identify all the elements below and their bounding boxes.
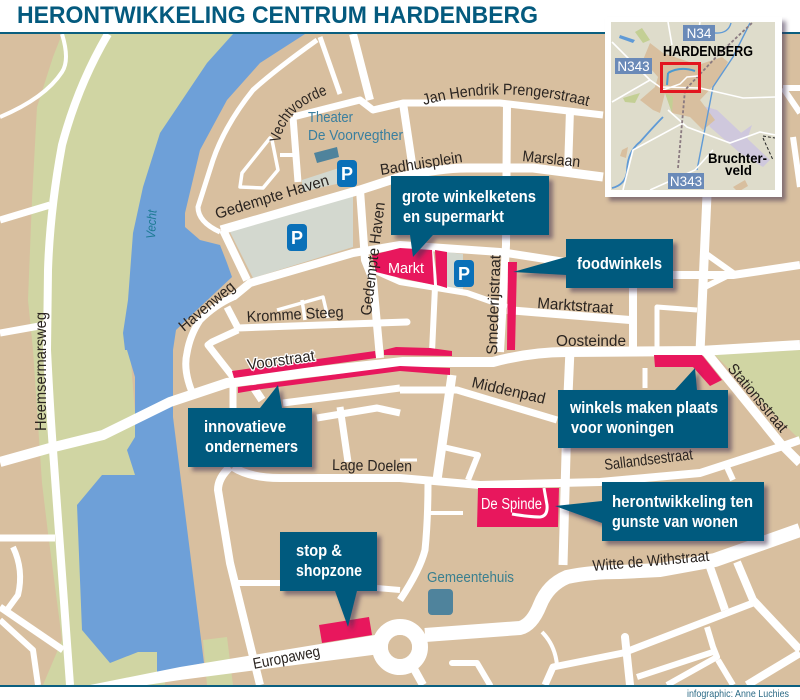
callout: foodwinkels: foodwinkels bbox=[577, 255, 662, 273]
street names: Middenpad bbox=[470, 374, 547, 408]
street names: Gedempte Haven bbox=[358, 201, 389, 316]
street names: Oosteinde bbox=[556, 333, 626, 350]
callout: winkels maken plaats voor woningen bbox=[558, 368, 728, 448]
inset road sign: N343 south: N343 bbox=[670, 174, 702, 189]
street names: Smederijstraat bbox=[484, 254, 505, 355]
highlighted zone: Markt bbox=[372, 248, 434, 285]
parking icon: Gedempte Haven bbox=[287, 224, 307, 251]
footer rule bbox=[0, 685, 800, 687]
road: Europaweg bbox=[85, 635, 380, 686]
park: green river banks bbox=[28, 34, 233, 685]
parking area: theatre bbox=[302, 168, 337, 192]
callout: herontwikkeling ten gunste van wonen: gunste van wonen bbox=[612, 513, 738, 531]
callout: innovatieve ondernemers: innovatieve bbox=[204, 418, 286, 436]
callout: grote winkelketens en supermarkt bbox=[391, 176, 549, 257]
callout: winkels maken plaats voor woningen: winkels maken plaats bbox=[569, 399, 718, 417]
park: station green bbox=[715, 350, 800, 440]
highlighted zone: De Spinde bbox=[477, 488, 559, 527]
street names: Vecht bbox=[143, 208, 160, 239]
inset locator box bbox=[662, 64, 700, 92]
street names: Havenweg bbox=[176, 278, 239, 335]
title: HERONTWIKKELING CENTRUM HARDENBERG bbox=[17, 2, 538, 29]
parking icon: Markt: P bbox=[458, 264, 470, 284]
callout: innovatieve ondernemers: ondernemers bbox=[205, 438, 298, 456]
street names: Markt bbox=[388, 261, 424, 277]
parking icon: Gedempte Haven: P bbox=[291, 228, 303, 248]
street names: Badhuisplein bbox=[379, 149, 464, 179]
street names: Witte de Withstraat bbox=[592, 548, 711, 575]
callout: grote winkelketens en supermarkt: en supermarkt bbox=[403, 208, 504, 226]
highlighted zone: De Spinde: De Spinde bbox=[481, 496, 542, 513]
street names: Europaweg bbox=[252, 643, 322, 673]
callout: grote winkelketens en supermarkt: grote winkelketens bbox=[402, 188, 536, 206]
callout: herontwikkeling ten gunste van wonen bbox=[555, 482, 764, 541]
callout: stop & shopzone bbox=[280, 532, 377, 627]
highlighted zone: Stationsstraat bbox=[654, 355, 722, 386]
callout: herontwikkeling ten gunste van wonen: herontwikkeling ten bbox=[612, 493, 753, 511]
callout: stop & shopzone: stop & bbox=[296, 542, 342, 560]
street names: Kromme Steeg bbox=[246, 304, 344, 326]
highlighted zone: Markt east bbox=[435, 250, 447, 288]
street names: Lage Doelen bbox=[332, 457, 412, 475]
street names: Marslaan bbox=[522, 148, 581, 171]
parking icon: Markt bbox=[454, 260, 474, 287]
street names: Voorstraat bbox=[246, 348, 317, 374]
label: Theater De Voorvegther: Theater bbox=[308, 109, 353, 126]
callout: foodwinkels bbox=[513, 239, 673, 288]
park: green patch at Europaweg bbox=[203, 637, 233, 685]
highlighted zone: stop and shop bbox=[319, 617, 372, 643]
roundabout bbox=[380, 627, 420, 667]
highlighted zone: Smederijstraat bbox=[507, 262, 517, 350]
street names: Heemsermarsweg bbox=[33, 312, 50, 431]
highlighted zone: Voorstraat bbox=[232, 347, 452, 393]
parking icon: theatre: P bbox=[341, 164, 353, 184]
river Vecht bbox=[77, 34, 305, 672]
inset road sign: N34: N34 bbox=[687, 26, 712, 41]
inset frame bbox=[605, 17, 782, 197]
label: Gemeentehuis: Gemeentehuis bbox=[427, 569, 514, 586]
street names: Vechtvoorde bbox=[270, 86, 326, 141]
street names: Stationsstraat bbox=[724, 361, 791, 436]
inset road sign: N343 west: N343 bbox=[617, 59, 650, 74]
callout: innovatieve ondernemers bbox=[188, 385, 312, 467]
callout: winkels maken plaats voor woningen: voor woningen bbox=[571, 419, 674, 437]
street names: Marktstraat bbox=[537, 295, 614, 317]
inset label: Bruchterveld: veld bbox=[725, 162, 752, 178]
building: Gemeentehuis bbox=[428, 589, 453, 615]
header rule bbox=[0, 32, 800, 34]
street names: Jan Hendrik Prengerstraat bbox=[424, 83, 590, 106]
street names: Gedempte Haven bbox=[213, 172, 331, 223]
parking icon: theatre bbox=[337, 160, 357, 187]
parking area: Gedempte Haven bbox=[228, 193, 353, 278]
building: theatre bbox=[314, 147, 339, 163]
street names: Sallandsestraat bbox=[603, 446, 694, 474]
inset locator map bbox=[605, 17, 782, 197]
callout: stop & shopzone: shopzone bbox=[296, 562, 362, 580]
label: Theater De Voorvegther: De Voorvegther bbox=[308, 127, 403, 144]
inset label: Hardenberg: HARDENBERG bbox=[663, 44, 753, 60]
parking area: Markt bbox=[447, 252, 463, 293]
inset label: Bruchterveld: Bruchter- bbox=[708, 150, 767, 166]
